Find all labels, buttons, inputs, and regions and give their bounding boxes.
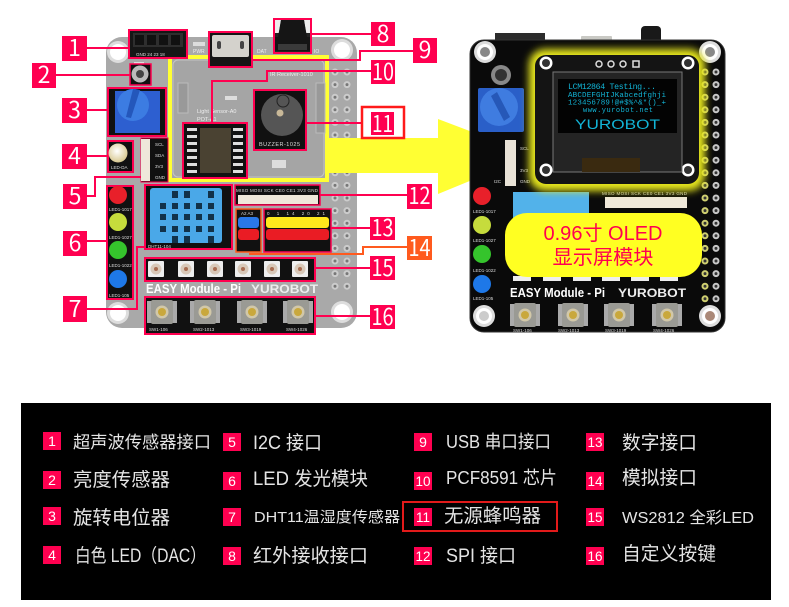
label 9 [413, 31, 437, 65]
component 13: digital pins: 0 1 14 20 21 [267, 211, 325, 216]
legend 3: 旋转电位器 [73, 507, 170, 529]
SPI header: MISO MOSI SCK CE0 CE1 3V3 GND [602, 191, 688, 196]
component 10: PCF8591 chip [183, 123, 247, 178]
component 6: LED column: LED1-1027 [109, 235, 132, 240]
label 4 [62, 137, 87, 171]
label 5: 5 [69, 177, 81, 211]
legend 1: 超声波传感器接口 [73, 433, 211, 452]
legend 11: 无源蜂鸣器 [444, 505, 541, 527]
legend 16: 自定义按键 [622, 543, 716, 565]
buttons: SW2-1013 [558, 328, 580, 333]
component 1: ultrasonic port [129, 30, 187, 58]
brightness sensor [491, 65, 511, 85]
OLED screen: LCM12864 Testing... [568, 82, 656, 92]
component 9: USB port [209, 32, 252, 67]
LED column: LED1-1017 [473, 209, 496, 214]
component 4: white LED [108, 141, 133, 172]
label 12: 12 [408, 177, 430, 211]
DHT11 sensor [513, 192, 589, 218]
component 5: I2C header: SDA [155, 153, 164, 158]
legend 16 [586, 543, 716, 565]
legend 5: I2C 接口 [253, 432, 322, 454]
I2C header: GND [520, 179, 531, 184]
label 8: 8 [377, 15, 389, 49]
legend 12: SPI 接口 [446, 545, 516, 567]
SPI header [602, 191, 688, 208]
potentiometer [478, 88, 524, 132]
LED column: LED1-1022 [473, 268, 496, 273]
buttons: SW1-106 [513, 328, 532, 333]
label 2 [32, 56, 56, 90]
legend 8: 8 [228, 548, 236, 564]
legend 4: 4 [48, 547, 56, 563]
component 11: buzzer [254, 90, 306, 150]
label 7: 7 [69, 290, 81, 324]
legend 15: 15 [588, 509, 603, 525]
left board: DAT [257, 49, 267, 55]
I2C header: I2C [494, 179, 502, 184]
yellow highlight frame [170, 57, 327, 180]
highlight box around item 11 [403, 502, 557, 531]
component 6: LED column [107, 186, 133, 299]
board logo: YUROBOT [618, 286, 687, 300]
component 15: WS2812 LEDs [145, 258, 315, 281]
component 8: IR receiver [274, 19, 311, 53]
legend 6: LED 发光模块 [253, 468, 368, 490]
left board [106, 37, 357, 328]
leader lines [56, 34, 413, 316]
component 3: potentiometer [108, 88, 166, 136]
callout: OLED module: 显示屏模块 [552, 246, 654, 269]
label 8 [371, 15, 395, 49]
OLED screen: www.yurobot.net [583, 107, 653, 115]
component 5: I2C header: 3V3 [155, 164, 164, 169]
left board: PWR [193, 49, 205, 55]
legend 4 [43, 545, 206, 567]
OLED module [529, 49, 705, 191]
legend 5: 5 [228, 434, 236, 450]
legend 14: 模拟接口 [622, 467, 697, 489]
buttons: SW4-1026 [653, 328, 675, 333]
component 5: I2C header: SCL [155, 142, 164, 147]
legend 10: PCF8591 芯片 [446, 468, 557, 488]
component 6: LED column: LED1-1022 [109, 263, 132, 268]
label 14: 14 [408, 229, 431, 263]
label 16: 16 [372, 298, 394, 332]
legend 13: 13 [588, 434, 603, 450]
OLED screen: YUROBOT [575, 116, 661, 132]
legend 3: 3 [48, 508, 56, 524]
legend 4: 白色 LED（DAC） [75, 545, 206, 567]
label 6 [63, 224, 87, 258]
label 9: 9 [419, 31, 431, 65]
legend 6: 6 [228, 473, 236, 489]
legend 7: 7 [228, 509, 236, 525]
board name: EASY Module - Pi [146, 282, 241, 296]
component 7: DHT11 sensor: DHT11-104 [148, 244, 171, 249]
legend 9: USB 串口接口 [446, 432, 551, 452]
yellow highlight frame: IR Receiver-1010 [270, 72, 313, 78]
buttons: SW3-1019 [605, 328, 627, 333]
I2C header [494, 140, 531, 186]
buttons [510, 303, 682, 333]
legend 15: WS2812 全彩LED [622, 509, 754, 527]
component 16: buttons [145, 297, 315, 334]
legend 1: 1 [48, 433, 56, 449]
legend 12: 12 [416, 548, 431, 564]
component 16: buttons: SW4-1026 [286, 327, 308, 332]
arrow [327, 119, 533, 194]
component 16: buttons: SW2-1013 [193, 327, 215, 332]
label 10: 10 [372, 53, 394, 87]
component 13: digital pins [264, 209, 331, 252]
component 12: SPI header: MISO MOSI SCK CE0 CE1 3V3 GND [236, 188, 319, 193]
legend 10 [414, 468, 557, 490]
component 1: ultrasonic port: GND 24 23 18 [136, 52, 165, 57]
label 5 [63, 177, 87, 211]
legend 11: 11 [416, 509, 430, 525]
legend 13 [586, 432, 697, 454]
component 2: light sensor [130, 64, 151, 85]
OLED screen [553, 72, 682, 172]
legend 10: 10 [416, 473, 431, 489]
label 6: 6 [69, 224, 81, 258]
legend 12 [414, 545, 516, 567]
legend 16: 16 [588, 548, 603, 564]
label 2: 2 [38, 56, 50, 90]
I2C header: 3V3 [520, 168, 529, 173]
label 3: 3 [68, 91, 81, 125]
board name: EASY Module - Pi [510, 286, 605, 300]
OLED screen: 123456789!@#$%^&*()_+ [568, 98, 666, 108]
yellow highlight frame: Light Sensor-A0 [197, 109, 236, 115]
component 14: analog pins: A2 A3 [241, 211, 254, 216]
LED column: LED1-105 [473, 296, 494, 301]
label 7 [63, 290, 87, 324]
component 12: SPI header [235, 185, 320, 205]
OLED screen: ABCDEFGHIJKabcedfghji [568, 92, 666, 100]
legend 2: 2 [48, 472, 56, 488]
label 13: 13 [372, 209, 394, 243]
label 11 [362, 105, 404, 139]
left board: IO [314, 49, 319, 55]
component 16: buttons: SW3-1019 [240, 327, 262, 332]
callout: OLED module: 0.96寸 OLED [544, 222, 662, 245]
legend 9: 9 [419, 434, 427, 450]
component 5: I2C header [141, 138, 168, 182]
label 1 [62, 29, 87, 63]
component 5: I2C header: GND [155, 175, 166, 180]
label 4: 4 [68, 137, 81, 171]
component 6: LED column: LED1-105 [109, 293, 130, 298]
LED column [473, 187, 496, 301]
I2C header: SCL [520, 146, 529, 151]
legend 14 [586, 467, 697, 490]
yellow highlight frame: POT-A1 [197, 117, 217, 123]
legend 15 [586, 508, 754, 527]
component 11: buzzer: BUZZER-1025 [259, 142, 300, 148]
legend 14: 14 [588, 473, 603, 489]
legend 5 [223, 432, 322, 454]
label 15: 15 [372, 249, 394, 283]
legend 7: DHT11温湿度传感器 [254, 509, 400, 526]
legend 13: 数字接口 [622, 432, 697, 454]
component 14: analog pins [236, 209, 261, 252]
label 11: 11 [372, 105, 393, 139]
callout: OLED module [505, 213, 702, 277]
component 6: LED column: LED1-1017 [109, 207, 132, 212]
LED column: LED1-1027 [473, 238, 496, 243]
legend panel [21, 403, 771, 600]
component 7: DHT11 sensor [145, 185, 232, 249]
WS2812 LEDs [513, 276, 678, 281]
right board [470, 26, 725, 333]
component 4: white LED: LED-DA [111, 165, 128, 170]
component 16: buttons: SW1-106 [149, 327, 168, 332]
legend 8: 红外接收接口 [253, 545, 368, 567]
label 3 [62, 91, 87, 125]
label 1: 1 [68, 29, 81, 63]
board logo: YUROBOT [251, 282, 319, 296]
legend 2: 亮度传感器 [73, 469, 170, 491]
